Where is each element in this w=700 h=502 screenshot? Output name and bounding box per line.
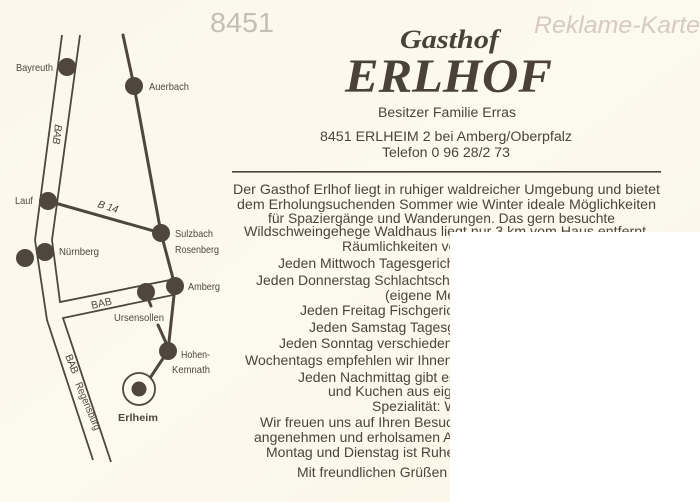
body text: Jeden Sonntag verschiedene Braten (279, 335, 506, 351)
map labels: B 14 (96, 198, 120, 216)
body text: Räumlichkeiten vorhanden (342, 238, 508, 254)
map labels: Sulzbach (175, 228, 213, 240)
map labels: BAB (90, 296, 113, 312)
body text: Wir freuen uns auf Ihren Besuch und einen (260, 414, 526, 430)
body text: und Kuchen aus eigener Küche (328, 383, 524, 399)
body text: Jeden Donnerstag Schlachtschüssel (256, 272, 482, 288)
map labels: Nürnberg (59, 246, 99, 258)
map labels: BAB (50, 124, 64, 145)
divider rule (232, 171, 661, 173)
body text: Mit freundlichen Grüßen (297, 464, 447, 480)
handwritten note: advertising card: Reklame-Karte (534, 12, 700, 39)
map labels: Ursensollen (114, 312, 164, 324)
body text: Jeden Mittwoch Tagesgericht (278, 255, 458, 271)
map labels (15, 62, 220, 432)
Erlheim destination marker (123, 373, 155, 405)
motorway lines (35, 35, 173, 462)
map labels: Lauf (15, 195, 33, 207)
heading: ERLHOF: ERLHOF (344, 50, 552, 103)
body text: dem Erholungsuchenden Sommer wie Winter ideale Möglichkeiten (237, 196, 656, 212)
map labels: Kemnath (172, 364, 210, 376)
owner line: Besitzer Familie Erras (378, 105, 516, 120)
map labels: Rosenberg (175, 244, 219, 256)
heading: Gasthof: Gasthof (400, 25, 502, 54)
white cover panel (450, 232, 700, 502)
map labels: Hohen- (181, 349, 210, 361)
body text: Wildschweingehege Waldhaus liegt nur 3 km vom Haus entfernt. (244, 223, 650, 239)
map labels: Amberg (188, 281, 220, 293)
body text: Spezialität: Wild (372, 398, 472, 414)
town markers (16, 58, 184, 360)
handwritten note: postcode: 8451 (210, 7, 274, 38)
telephone: Telefon 0 96 28/2 73 (382, 145, 510, 160)
body text: Jeden Nachmittag gibt es Kaffee (298, 369, 500, 385)
main roads (48, 35, 175, 378)
body text: Montag und Dienstag ist Ruhetag (266, 444, 474, 460)
body text: für Spaziergänge und Wanderungen. Das gern besuchte (268, 210, 615, 226)
body text: Jeden Freitag Fischgerichte (300, 302, 473, 318)
body text: Jeden Samstag Tagesgericht (309, 319, 489, 335)
route map (15, 35, 220, 462)
map labels: Erlheim (118, 412, 158, 424)
map labels: Regensburg (72, 380, 103, 432)
body text: angenehmen und erholsamen Aufenthalt (254, 429, 506, 445)
body text: Wochentags empfehlen wir Ihnen Brotzeit (245, 352, 504, 368)
map labels: Auerbach (149, 81, 189, 93)
map labels: BAB (62, 353, 81, 376)
map labels: Bayreuth (16, 62, 53, 74)
body text: Der Gasthof Erlhof liegt in ruhiger waldreicher Umgebung und bietet (233, 181, 660, 197)
address: 8451 ERLHEIM 2 bei Amberg/Oberpfalz (320, 129, 572, 144)
body text (233, 181, 660, 480)
body text: (eigene Metzgerei) (385, 287, 502, 303)
